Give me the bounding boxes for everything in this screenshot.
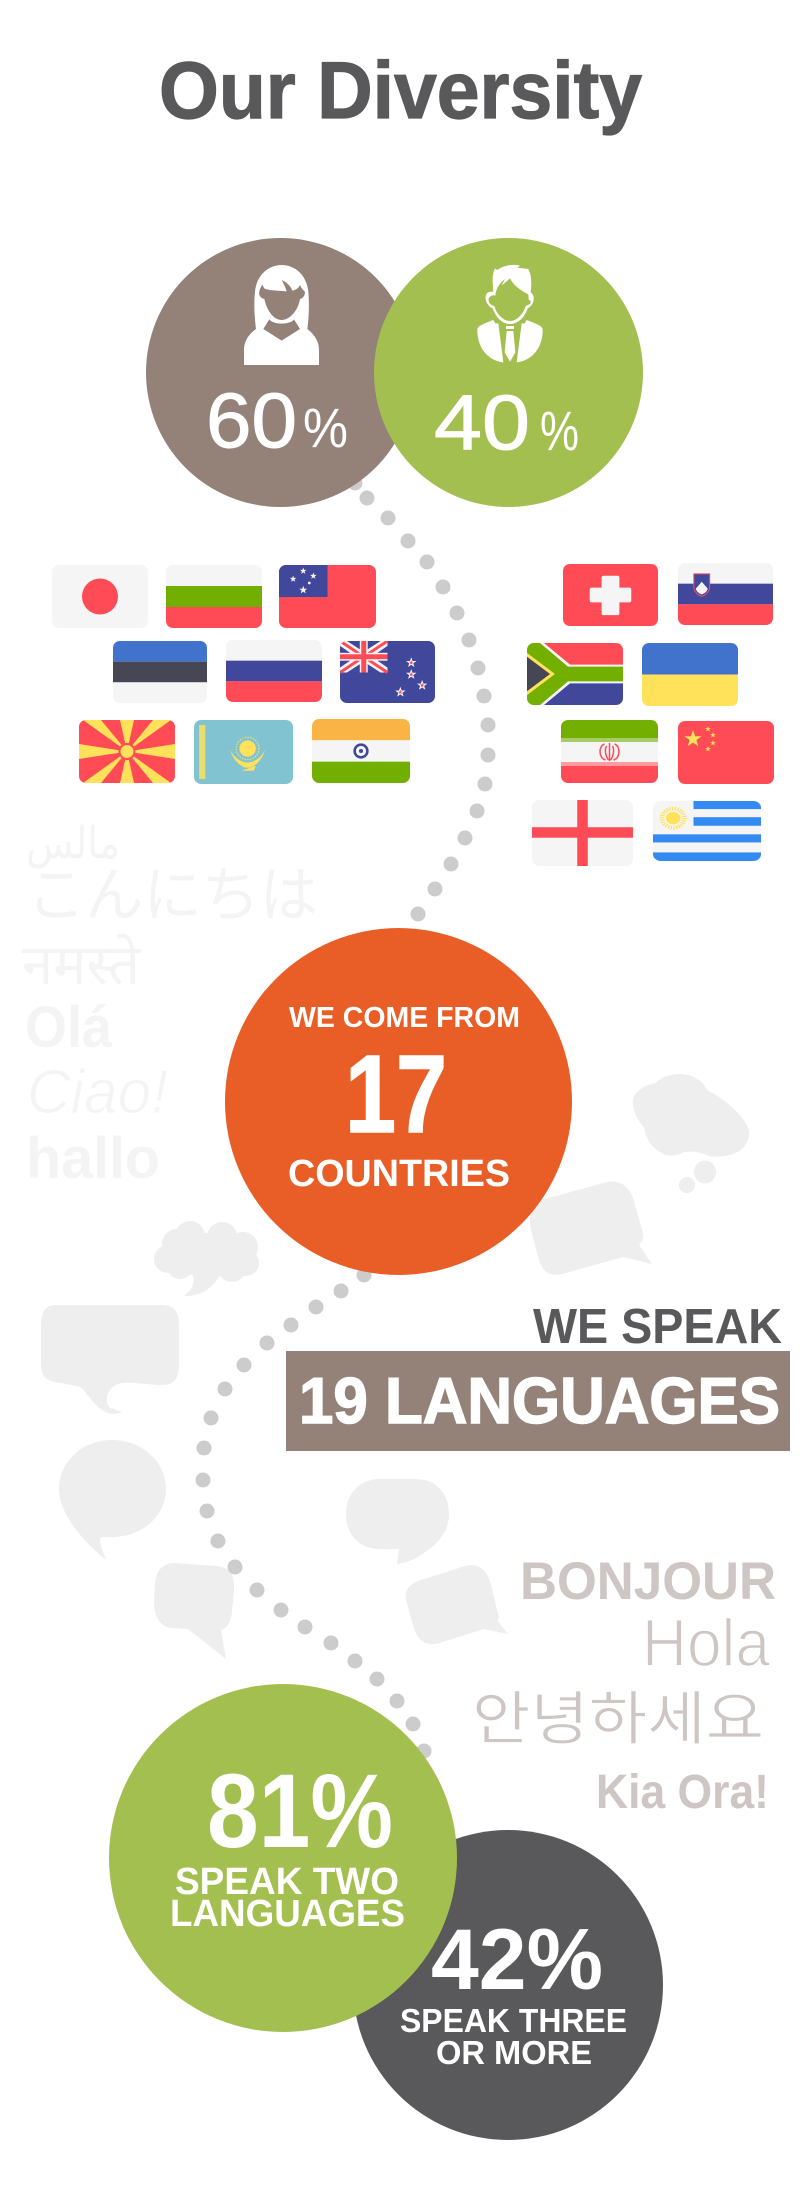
panel: women 60% — [146, 238, 415, 507]
heading banner: 19 languages: 19 LANGUAGES — [299, 1364, 780, 1437]
panel: women 60%: % — [303, 396, 348, 459]
flag: Japan — [52, 565, 148, 628]
text: we come from: WE COME FROM — [289, 1002, 520, 1034]
bubble: round middle — [346, 1479, 449, 1564]
title: Our Diversity — [159, 46, 642, 136]
number: 42%: 42% — [431, 1912, 603, 2008]
greetings: right group: Hola — [642, 1606, 771, 1681]
text: speak three: SPEAK THREE — [400, 2002, 627, 2039]
faint greetings: left group: مالس — [26, 818, 120, 869]
faint greetings: left group: こんにちは — [27, 847, 318, 934]
faint greetings: left group: Olá — [25, 995, 113, 1060]
flag: New Zealand — [340, 641, 435, 703]
dotted path upper — [348, 476, 496, 922]
flag: Bulgaria — [166, 565, 262, 628]
faint greetings: left group: Ciao! — [27, 1058, 168, 1127]
greetings: right group: BONJOUR — [520, 1552, 776, 1611]
number: 81%: 81% — [207, 1753, 393, 1870]
panel: 42% speak three or more — [353, 1830, 663, 2140]
number: 17: 17 — [345, 1033, 447, 1156]
bubble: round left — [59, 1440, 166, 1560]
panel: 17 countries — [225, 928, 572, 1275]
flag: China — [678, 721, 774, 784]
heading: we speak: WE SPEAK — [533, 1300, 782, 1354]
speech bubbles background — [41, 1074, 749, 1659]
greetings: right group: 안녕하세요 — [472, 1672, 764, 1756]
text: or more: OR MORE — [436, 2034, 592, 2071]
flag: Samoa — [279, 565, 376, 628]
flag: Slovenia — [678, 563, 773, 625]
text: languages: LANGUAGES — [170, 1893, 405, 1935]
flag: Iran — [561, 720, 658, 783]
panel: men 40% — [374, 238, 643, 507]
flag: North Macedonia — [79, 720, 175, 783]
flag: Kazakhstan — [194, 720, 293, 784]
panel: 81% speak two languages — [109, 1684, 457, 2032]
icon: man — [477, 265, 543, 362]
bubble: thought cloud top right — [633, 1074, 749, 1193]
bubble: cloud left of orange circle — [154, 1221, 259, 1296]
faint greetings: left group: hallo — [26, 1126, 160, 1191]
greetings: right group — [472, 1552, 776, 1819]
flag: India — [312, 719, 410, 783]
flag: South Africa — [527, 643, 623, 705]
text: speak two: SPEAK TWO — [175, 1861, 399, 1903]
bubble: rounded rectangle left — [41, 1305, 179, 1414]
flag: England — [532, 800, 633, 866]
60 percent: 60 — [206, 376, 297, 464]
panel: men 40%: % — [540, 399, 579, 462]
flag: Russia — [226, 640, 322, 702]
flag: Ukraine — [642, 643, 738, 706]
bubble: tilted speech right of orange circle — [530, 1182, 652, 1275]
40 percent: 40 — [434, 378, 530, 466]
flag: Switzerland — [563, 564, 658, 626]
flag: Estonia — [113, 641, 207, 703]
dotted path lower — [196, 1268, 432, 1758]
text: countries: COUNTRIES — [288, 1153, 510, 1195]
icon: woman — [244, 265, 319, 365]
bubble: small tilted lower left — [154, 1563, 234, 1659]
faint greetings: left group: नमस्ते — [22, 920, 141, 1001]
bubble: small tilted lower right — [406, 1565, 508, 1644]
faint greetings: left group — [22, 818, 318, 1191]
greetings: right group: Kia Ora! — [596, 1766, 769, 1819]
flag: Uruguay — [653, 801, 761, 861]
